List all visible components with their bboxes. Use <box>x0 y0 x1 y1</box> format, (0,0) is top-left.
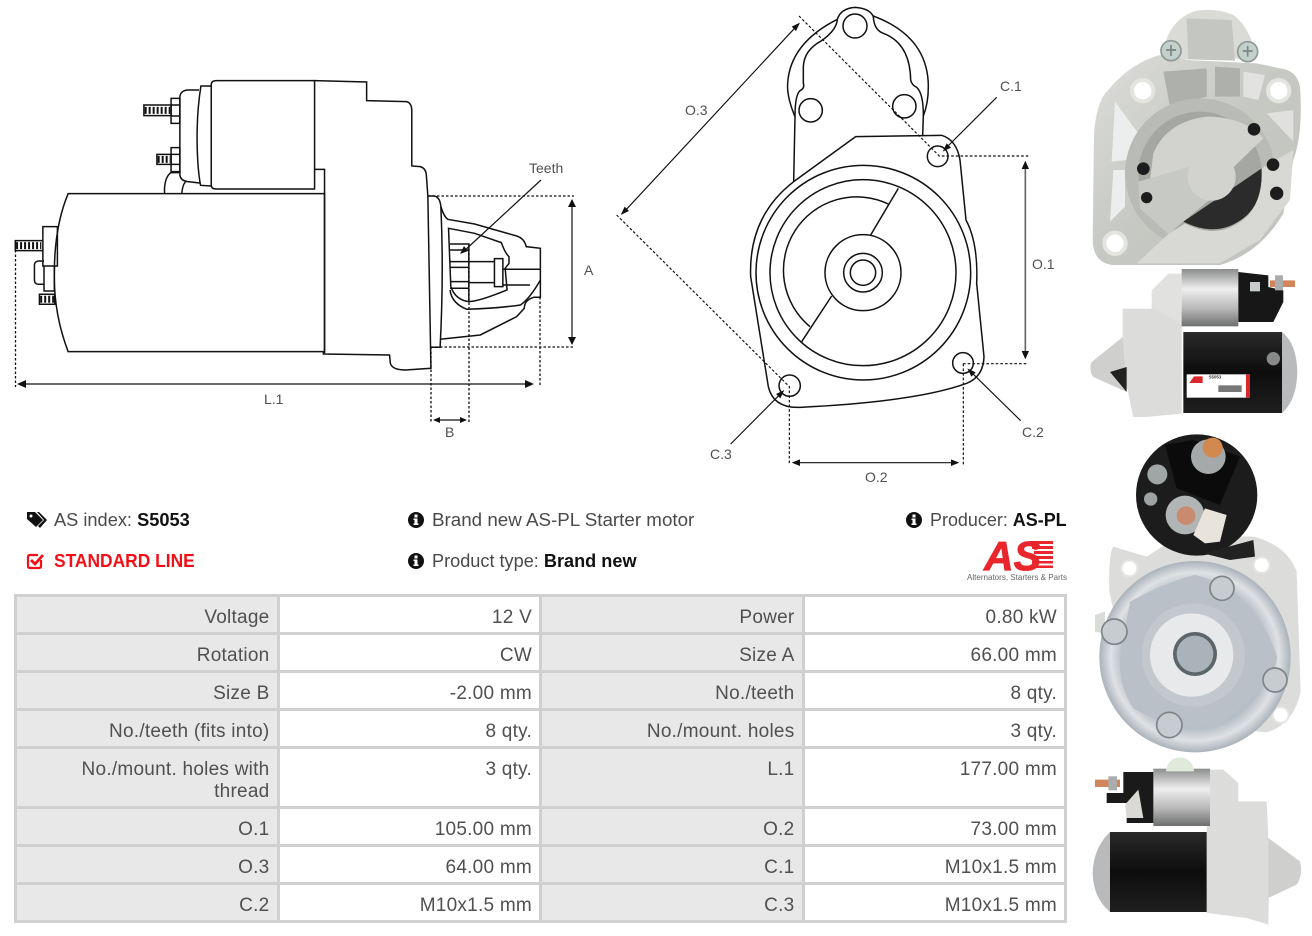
info: producer: Producer: AS-PL <box>930 509 1067 530</box>
specification table: O.3 <box>238 857 270 878</box>
icon: tags <box>27 512 47 528</box>
specification table: 3 qty. <box>1010 721 1057 742</box>
front view technical drawing <box>616 6 1029 466</box>
info row: standard line: STANDARD LINE <box>54 550 195 571</box>
specification table: 8 qty. <box>1010 683 1057 704</box>
icon: info <box>408 512 424 528</box>
specification table: 66.00 mm <box>971 645 1057 666</box>
specification table: 177.00 mm <box>960 759 1057 780</box>
specification table: C.2 <box>239 895 270 916</box>
specification table: M10x1.5 mm <box>945 895 1057 916</box>
specification table: 12 V <box>492 607 532 628</box>
specification table: 8 qty. <box>485 721 532 742</box>
info: product type: Product type: Brand new <box>432 550 637 571</box>
specification table: Voltage <box>204 607 270 628</box>
photo: side view with label: S5053 <box>1209 374 1222 379</box>
specification table: CW <box>500 645 532 666</box>
specification table: No./mount. holes <box>647 721 794 742</box>
photo: flange view <box>1092 10 1301 265</box>
specification table: 0.80 kW <box>986 607 1057 628</box>
text: L.1 <box>264 391 283 407</box>
specification table: No./teeth <box>715 683 794 704</box>
logo: AS-PL <box>967 538 1067 582</box>
info: description: Brand new AS-PL Starter motor <box>432 509 694 530</box>
specification table: L.1 <box>767 759 794 780</box>
specification table: Power <box>739 607 794 628</box>
specification table <box>14 594 1067 923</box>
icon: info <box>408 553 424 569</box>
specification table: M10x1.5 mm <box>945 857 1057 878</box>
photo: side view with label <box>1090 269 1298 417</box>
text: B <box>445 424 454 440</box>
specification table: C.3 <box>764 895 794 916</box>
specification table: No./mount. holes with <box>82 759 270 780</box>
specification table: thread <box>214 781 270 802</box>
info row: AS index: AS index: S5053 <box>54 509 190 530</box>
photo: opposite side view <box>1092 758 1302 924</box>
text: O.2 <box>865 469 888 485</box>
specification table: Rotation <box>197 645 270 666</box>
specification table: 105.00 mm <box>435 819 532 840</box>
icon: info <box>906 512 922 528</box>
specification table: Size A <box>739 645 794 666</box>
side view technical drawing <box>14 80 576 423</box>
photo: rear view <box>1095 434 1301 752</box>
specification table: 64.00 mm <box>446 857 532 878</box>
specification table: C.1 <box>764 857 794 878</box>
specification table: 73.00 mm <box>971 819 1057 840</box>
text: A <box>584 262 593 278</box>
drawing labels: Teeth <box>529 160 563 176</box>
dimension lines <box>16 196 574 422</box>
text: C.3 <box>710 446 732 462</box>
text: O.1 <box>1032 256 1055 272</box>
specification table: -2.00 mm <box>450 683 532 704</box>
specification table: No./teeth (fits into) <box>109 721 270 742</box>
icon: checked box <box>26 554 44 570</box>
specification table: O.1 <box>238 819 270 840</box>
text: C.2 <box>1022 424 1044 440</box>
text: C.1 <box>1000 78 1022 94</box>
specification table: M10x1.5 mm <box>420 895 532 916</box>
specification table: 3 qty. <box>485 759 532 780</box>
specification table: O.2 <box>763 819 794 840</box>
text: O.3 <box>685 102 708 118</box>
specification table: Size B <box>213 683 270 704</box>
logo: AS-PL: Alternators, Starters & Parts <box>967 572 1067 582</box>
